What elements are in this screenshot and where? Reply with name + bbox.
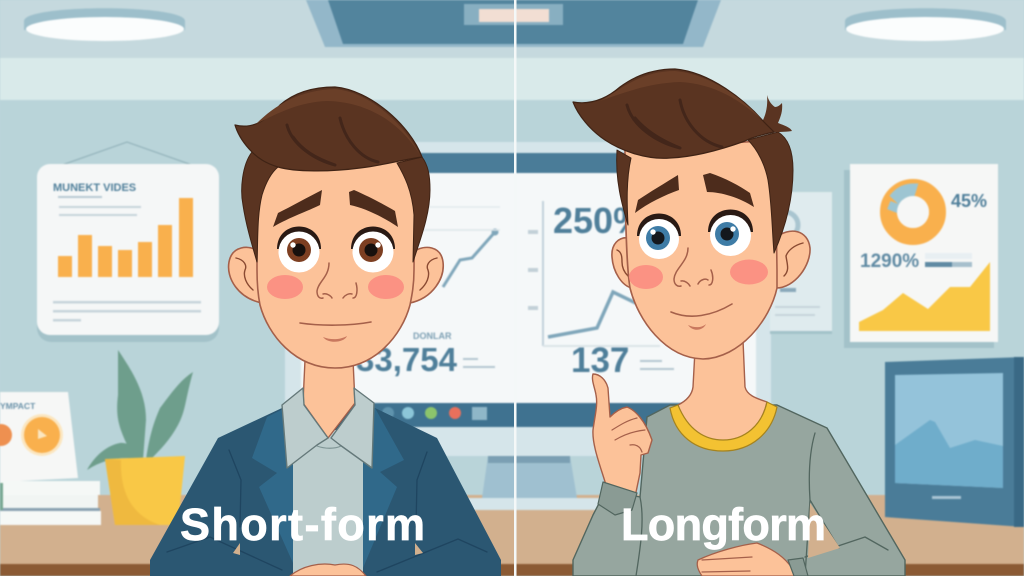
monitor right chart [528,201,660,346]
label: Short-form: Short-form [180,499,425,550]
blazer lapels [252,408,404,572]
ceiling fixture [306,0,721,47]
eyebrows [273,190,398,227]
tablet on desk [885,357,1024,527]
small poster behind right head [770,192,832,334]
ceiling light left [24,8,185,41]
hair [235,87,430,262]
ears [229,247,443,303]
hair [573,69,793,253]
desk [0,495,1024,576]
monitor left chart line [420,207,500,287]
neck [678,340,767,442]
center divider [514,0,516,576]
hands [290,564,366,576]
ears [612,231,810,288]
eyes [637,210,753,259]
sweater [573,405,905,576]
monitor left figures [356,331,495,378]
person: longform [573,69,905,576]
blazer [150,408,501,576]
nose [674,248,713,286]
eyebrows [635,173,754,213]
small poster on desk left [0,392,78,482]
mouth [300,322,371,342]
monitor right figures: 250% [553,200,645,241]
area chart [859,262,990,331]
wall monitor [0,142,1024,527]
potted plant [87,350,193,525]
monitor right figures: 137 [571,341,629,380]
blush [629,260,768,289]
monitor right figures [553,200,674,380]
neck [303,360,355,438]
small poster on desk left: YMPACT [0,401,36,411]
eyes [277,226,395,272]
person: short-form [150,87,501,576]
stacked books [0,481,101,525]
poster: donut and area chart: 1290% [860,251,919,272]
face [625,140,777,359]
monitor left figures: 33,754 [356,341,458,378]
shirt [293,430,363,576]
nose [317,263,357,298]
mouth [671,304,732,330]
donut chart [888,188,938,236]
poster: donut and area chart: 45% [951,191,987,211]
poster: donut and area chart [844,164,998,348]
raised pointing hand [592,374,652,497]
monitor left figures: DONLAR [413,331,452,341]
poster: video bar chart: MUNEKT VIDES [53,182,136,194]
label: Longform: Longform [621,499,826,550]
lower hand [697,543,808,576]
poster: video bar chart [37,142,219,342]
face [257,160,415,368]
blush [267,275,404,299]
shirt collar [282,388,374,468]
sweater cuff [598,482,637,515]
sweater neckline [670,402,777,451]
ceiling light right [845,8,1006,41]
